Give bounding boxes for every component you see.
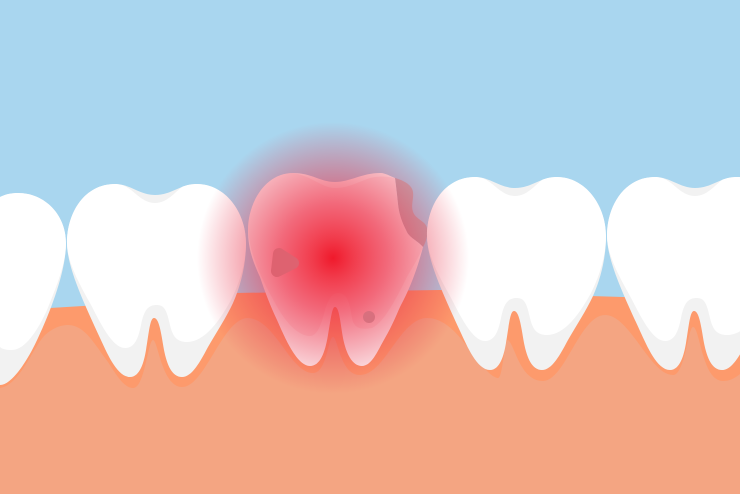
tooth: far left <box>0 193 66 385</box>
tooth: inflamed centre tooth <box>248 173 427 366</box>
tooth body <box>248 173 423 366</box>
tooth: left of centre <box>67 184 246 377</box>
gum: darker orange upper layer <box>0 290 740 494</box>
cavity: small round spot <box>363 311 375 323</box>
tooth: far right <box>607 177 740 370</box>
tooth inner shading <box>248 173 423 336</box>
cavity: cluster spot <box>277 254 293 271</box>
red pain glow <box>197 122 469 394</box>
tooth: right of centre <box>427 177 606 370</box>
gum: light main layer <box>0 315 740 494</box>
decayed chip at upper right <box>395 178 427 247</box>
